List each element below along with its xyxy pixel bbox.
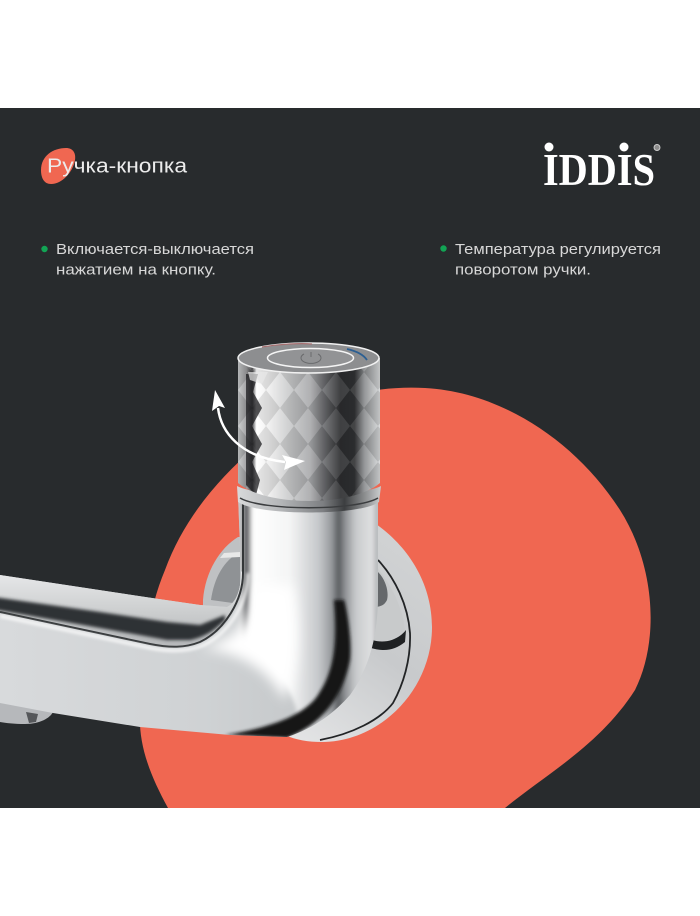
rotation arrows — [212, 390, 305, 470]
wall plate right — [285, 524, 432, 742]
coral blob — [140, 388, 651, 808]
title: Ручка-кнопка — [47, 156, 188, 178]
temperature arcs — [262, 344, 312, 347]
collar groove — [240, 498, 378, 508]
power icon — [301, 352, 321, 363]
plate inner contour and reflections — [320, 560, 410, 740]
handle top face — [238, 343, 379, 373]
dark reflection strip on elbow — [225, 600, 350, 738]
back wall plate left — [203, 537, 242, 612]
title with coral accent — [41, 148, 188, 184]
title accent blob — [41, 148, 75, 184]
collar — [237, 486, 381, 512]
left feature bullet text — [41, 241, 254, 278]
right feature bullet text — [440, 241, 661, 278]
left feature bullet text: Включается-выключается — [56, 241, 254, 258]
logo: IDDIS: IDDIS — [543, 144, 655, 195]
button ring — [268, 348, 354, 368]
dark background panel — [0, 108, 700, 808]
faucet body with spout — [0, 502, 378, 737]
right feature bullet text: поворотом ручки. — [455, 262, 591, 278]
nozzle — [0, 700, 53, 724]
chrome faucet — [0, 343, 432, 745]
right feature bullet text: Температура регулируется — [455, 241, 661, 258]
left feature bullet text: нажатием на кнопку. — [56, 262, 216, 278]
handle cylinder — [238, 358, 380, 501]
